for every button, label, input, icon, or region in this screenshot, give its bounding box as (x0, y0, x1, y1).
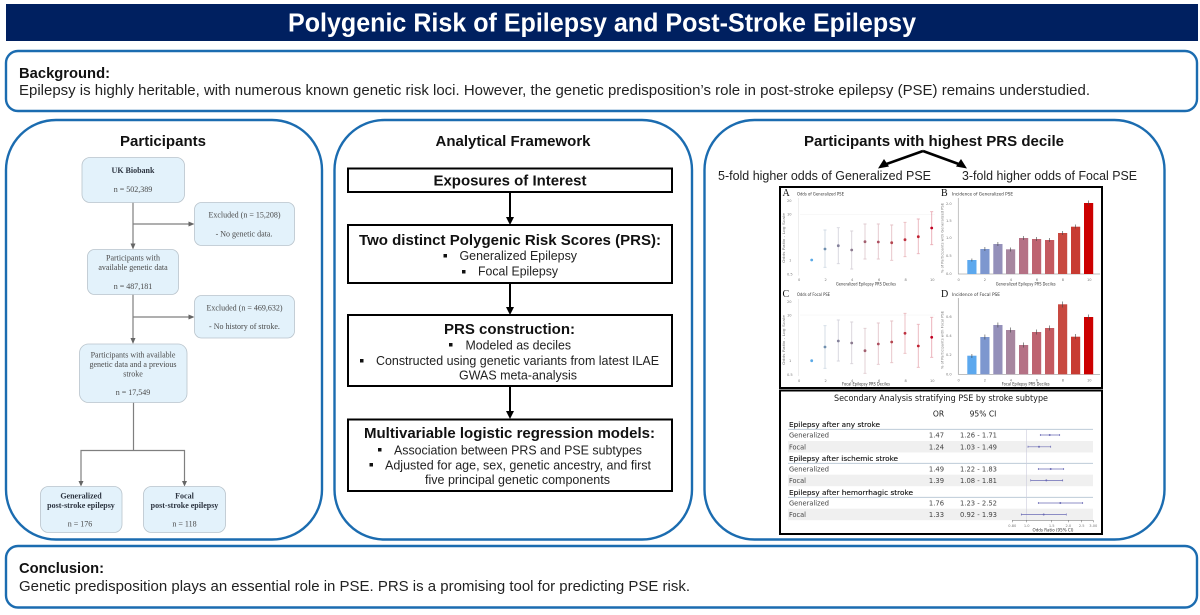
chart A: odds of generalized PSE: 20 (787, 199, 792, 203)
chart A: odds of generalized PSE: 6 (878, 278, 881, 282)
box: participants with genetic data: Participants with (106, 254, 160, 262)
chart A: odds of generalized PSE: 0 (798, 278, 801, 282)
section: any stroke: Generalized (789, 432, 829, 440)
chart A: odds of generalized PSE: 1 (789, 258, 791, 262)
box: participants with previous stroke: n = 17,549 (116, 388, 150, 397)
section: ischemic stroke: 1.08 - 1.81 (960, 477, 997, 485)
panel: conclusion: Conclusion: (19, 560, 104, 577)
box: PRS construction: PRS construction: (444, 321, 575, 338)
box: multivariable logistic regression (348, 420, 672, 491)
box: participants with genetic data: n = 487,181 (114, 282, 152, 291)
box: participants with previous stroke: Participants with available (91, 350, 176, 360)
chart D: incidence of focal PSE: 0 (958, 378, 960, 382)
box: generalized PSE: post-stroke epilepsy (47, 501, 115, 510)
chart C: odds of focal PSE: 0 (798, 379, 801, 383)
section: ischemic stroke: 1.39 (929, 477, 944, 485)
heading: participants: Participants (120, 133, 206, 150)
chart B: incidence of generalized PSE: Incidence of Generalized PSE (952, 192, 1013, 196)
box: focal PSE: n = 118 (172, 520, 197, 528)
panel: conclusion (6, 546, 1197, 608)
chart D: incidence of focal PSE (940, 289, 1100, 386)
chart B: incidence of generalized PSE: 4 (1010, 278, 1013, 282)
section: hemorrhagic stroke: 0.92 - 1.93 (960, 511, 997, 519)
forest plot axis (1008, 520, 1098, 532)
forest plot axis: Odds Ratio (95% CI) (1032, 528, 1074, 532)
chart D: incidence of focal PSE: 0.4 (946, 334, 952, 338)
chart C: odds of focal PSE: 10 (787, 314, 792, 318)
section: any stroke (789, 420, 1060, 451)
section: ischemic stroke: 1.49 (929, 466, 944, 474)
section: any stroke: 1.26 - 1.71 (960, 432, 997, 440)
title banner (6, 4, 1198, 41)
chart A: odds of generalized PSE (782, 188, 935, 286)
flow connectors (78, 202, 194, 486)
column headers: OR (933, 410, 945, 418)
chart A: odds of generalized PSE: Generalized Epilepsy PRS Deciles (836, 282, 896, 286)
section: any stroke: Epilepsy after any stroke (789, 420, 880, 429)
chart C: odds of focal PSE: 8 (904, 379, 908, 383)
forest plot axis: 1.0 (1024, 524, 1030, 528)
chart C: odds of focal PSE: 4 (851, 379, 854, 383)
box: excluded no stroke (194, 296, 294, 338)
chart A: odds of generalized PSE: Odds of Generalized PSE (797, 192, 844, 196)
chart B: incidence of generalized PSE: 1.5 (946, 219, 952, 223)
panel: analytical framework (334, 120, 692, 540)
chart C: odds of focal PSE: Focal Epilepsy PRS Deciles (842, 382, 890, 386)
box: multivariable logistic regression: Adjusted for age, sex, genetic ancestry, and first (385, 458, 652, 472)
section: ischemic stroke: Generalized (789, 466, 829, 474)
chart C: odds of focal PSE (782, 289, 935, 386)
shaded rows and rules (788, 429, 1093, 520)
section: any stroke: Focal (789, 443, 806, 451)
box: participants with genetic data: available genetic data (98, 263, 168, 272)
forest plot axis: 1.5 (1049, 524, 1055, 528)
section: ischemic stroke: 1.22 - 1.83 (960, 466, 997, 474)
arrows between boxes (506, 192, 514, 419)
text: 3-fold focal: 3-fold higher odds of Focal PSE (962, 169, 1137, 183)
section: ischemic stroke: Focal (789, 477, 806, 485)
box: focal PSE: Focal (175, 492, 195, 500)
chart D: incidence of focal PSE: 0.6 (946, 315, 952, 319)
chart D: incidence of focal PSE: Incidence of Focal PSE (952, 292, 1000, 297)
chart C: odds of focal PSE: 1 (789, 359, 791, 363)
chart D: incidence of focal PSE: 0.0 (946, 372, 952, 376)
section: hemorrhagic stroke: Epilepsy after hemorrhagic stroke (789, 488, 913, 497)
chart A: odds of generalized PSE: 2 (824, 278, 827, 282)
chart B: incidence of generalized PSE: 2.0 (946, 202, 952, 206)
chart C: odds of focal PSE: 0.5 (787, 373, 793, 377)
chart D: incidence of focal PSE: Focal Epilepsy PRS Deciles (1002, 382, 1050, 386)
section: ischemic stroke (789, 454, 1064, 485)
chart D: incidence of focal PSE: 10 (1087, 378, 1092, 382)
box: excluded no genetic data: - No genetic data. (216, 230, 272, 238)
box: multivariable logistic regression: Association between PRS and PSE subtypes (394, 443, 642, 457)
box: focal PSE (144, 486, 226, 532)
chart A: odds of generalized PSE: A (782, 188, 790, 199)
section: hemorrhagic stroke: Focal (789, 511, 806, 519)
chart B: incidence of generalized PSE: 2 (984, 278, 986, 282)
box: focal PSE: post-stroke epilepsy (151, 501, 218, 510)
chart B: incidence of generalized PSE (940, 188, 1100, 286)
box: PRS construction: Modeled as deciles (466, 338, 571, 352)
chart C: odds of focal PSE: 6 (878, 379, 881, 383)
chart A: odds of generalized PSE: 4 (851, 278, 854, 282)
panel: highest PRS decile (704, 120, 1164, 540)
panel: participants (6, 120, 322, 540)
chart D: incidence of focal PSE: D (941, 289, 948, 300)
box: participants with previous stroke: genetic data and a previous (89, 360, 177, 369)
chart D: incidence of focal PSE: 6 (1036, 378, 1039, 382)
chart C: odds of focal PSE: 20 (787, 300, 792, 304)
text: 5-fold generalized: 5-fold higher odds of Generalized PSE (718, 169, 931, 183)
box: two distinct PRS: Two distinct Polygenic Risk Scores (PRS): (359, 232, 661, 249)
section: hemorrhagic stroke: Generalized (789, 500, 829, 508)
panel: background (6, 51, 1197, 111)
chart B: incidence of generalized PSE: 10 (1087, 278, 1092, 282)
chart A: odds of generalized PSE: 10 (787, 212, 792, 216)
arrows: decile to odds (878, 151, 967, 168)
chart D: incidence of focal PSE: 4 (1010, 378, 1013, 382)
box: participants with genetic data (88, 250, 178, 294)
box: two distinct PRS (348, 225, 672, 283)
figure: decile charts (780, 187, 1102, 388)
chart C: odds of focal PSE: Odds of Focal PSE (797, 292, 830, 297)
heading: analytical framework: Analytical Framework (436, 133, 591, 150)
chart A: odds of generalized PSE: 0.5 (787, 272, 793, 276)
box: excluded no genetic data (194, 202, 294, 246)
box: generalized PSE (40, 486, 122, 532)
box: UK Biobank (82, 158, 184, 202)
box: UK Biobank: UK Biobank (112, 166, 155, 175)
section: any stroke: 1.24 (929, 443, 944, 451)
chart A: odds of generalized PSE: 8 (904, 278, 908, 282)
chart B: incidence of generalized PSE: 6 (1036, 278, 1039, 282)
box: PRS construction: GWAS meta-analysis (459, 368, 577, 382)
chart A: odds of generalized PSE: Odds Ratio - Log Scale (782, 212, 786, 263)
chart D: incidence of focal PSE: % of Participants with Focal PSE (940, 310, 944, 369)
box: participants with previous stroke: stroke (123, 370, 143, 378)
box: multivariable logistic regression: Multivariable logistic regression models: (364, 425, 655, 442)
title banner: Polygenic Risk of Epilepsy and Post-Stroke Epilepsy (288, 10, 917, 38)
forest plot axis: 2.5 (1079, 524, 1085, 528)
box: generalized PSE: Generalized (60, 492, 102, 500)
box: generalized PSE: n = 176 (68, 520, 92, 528)
chart B: incidence of generalized PSE: B (941, 188, 948, 199)
section: hemorrhagic stroke: 1.76 (929, 500, 944, 508)
box: two distinct PRS: Focal Epilepsy (478, 264, 559, 278)
chart B: incidence of generalized PSE: 0.5 (946, 254, 952, 258)
box: two distinct PRS: Generalized Epilepsy (460, 249, 578, 263)
forest plot axis: 3.00 (1089, 524, 1098, 528)
section: any stroke: 1.47 (929, 432, 944, 440)
panel: conclusion: Genetic predisposition plays an essential role in PSE. PRS is a promising tool for predicting PSE risk. (19, 578, 690, 595)
chart B: incidence of generalized PSE: 0 (958, 278, 960, 282)
box: excluded no stroke: Excluded (n = 469,632) (206, 304, 283, 312)
chart C: odds of focal PSE: C (782, 289, 790, 300)
chart B: incidence of generalized PSE: Generalized Epilepsy PRS Deciles (996, 282, 1056, 286)
box: PRS construction: Constructed using genetic variants from latest ILAE (376, 354, 659, 368)
chart C: odds of focal PSE: Odds Ratio - Log Scale (782, 314, 786, 365)
section: hemorrhagic stroke: 1.33 (929, 511, 944, 519)
chart B: incidence of generalized PSE: 8 (1062, 278, 1065, 282)
panel: background: Epilepsy is highly heritable, with numerous known genetic risk loci. However, the genetic predisposition’s role in post-stroke epilepsy (PSE) remains understudied. (19, 82, 1090, 99)
chart C: odds of focal PSE: 2 (824, 379, 827, 383)
section: hemorrhagic stroke (789, 488, 1083, 519)
box: PRS construction (348, 315, 672, 386)
box: exposures of interest (348, 168, 672, 192)
table title: Secondary Analysis stratifying PSE by stroke subtype (834, 393, 1048, 403)
box: multivariable logistic regression: five principal genetic components (425, 473, 610, 487)
box: excluded no stroke: - No history of stroke. (209, 322, 280, 331)
chart B: incidence of generalized PSE: 1.0 (946, 236, 952, 240)
section: hemorrhagic stroke: 1.23 - 2.52 (960, 500, 997, 508)
chart B: incidence of generalized PSE: % of Participants with Generalized PSE (940, 202, 944, 273)
box: excluded no genetic data: Excluded (n = 15,208) (208, 210, 281, 220)
box: participants with previous stroke (80, 344, 187, 402)
column headers (933, 410, 996, 418)
box: exposures of interest: Exposures of Interest (434, 172, 586, 190)
section: any stroke: 1.03 - 1.49 (960, 443, 997, 451)
chart D: incidence of focal PSE: 8 (1062, 378, 1065, 382)
forest plot axis: 2.0 (1065, 524, 1072, 528)
box: UK Biobank: n = 502,389 (114, 185, 152, 194)
section: ischemic stroke: Epilepsy after ischemic stroke (789, 454, 898, 463)
chart D: incidence of focal PSE: 2 (984, 378, 986, 382)
chart B: incidence of generalized PSE: 0.0 (946, 272, 952, 276)
heading: highest PRS decile: Participants with highest PRS decile (804, 133, 1064, 150)
column headers: 95% CI (970, 410, 996, 418)
forest plot axis: 0.80 (1008, 524, 1017, 528)
table: secondary analysis forest plot (780, 390, 1102, 534)
panel: background: Background: (19, 65, 110, 82)
chart A: odds of generalized PSE: 10 (930, 278, 935, 282)
chart D: incidence of focal PSE: 0.2 (946, 353, 952, 357)
chart C: odds of focal PSE: 10 (930, 379, 935, 383)
